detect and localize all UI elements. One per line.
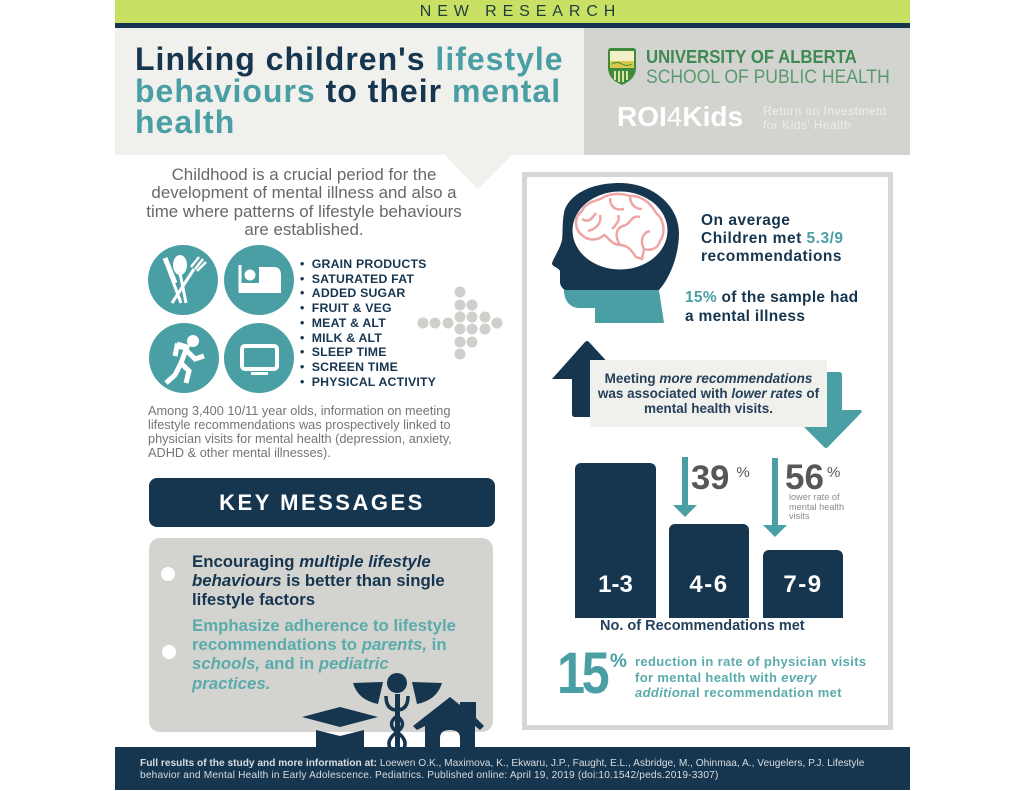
lifestyle list: • GRAIN PRODUCTS [300, 257, 427, 271]
lifestyle list: • SCREEN TIME [300, 360, 398, 374]
association callout [590, 360, 827, 427]
university name: UNIVERSITY OF ALBERTA [646, 46, 857, 67]
title: Linking children's lifestyle [135, 41, 564, 77]
bar 4-6: 4-6 [689, 571, 729, 598]
mental illness text: a mental illness [685, 308, 805, 324]
icon: bed [224, 245, 294, 315]
lifestyle list: • SLEEP TIME [300, 345, 387, 359]
message 2: schools, and in pediatric [192, 654, 389, 673]
title: behaviours to their mental [135, 73, 561, 109]
lower rate note: visits [789, 511, 809, 521]
bullet 1 [161, 567, 175, 581]
key messages panel [149, 538, 493, 732]
association callout: was associated with lower rates of [598, 386, 819, 401]
dotted arrow [418, 286, 502, 360]
logo panel [584, 28, 910, 155]
top banner: NEW RESEARCH [420, 3, 621, 20]
study description [148, 403, 452, 460]
lifestyle list [300, 257, 436, 389]
arrow: 56 percent [763, 458, 787, 537]
ROI4Kids tagline: Return on Investment [763, 104, 887, 118]
lower rate note: lower rate of [789, 492, 840, 502]
mental illness text: 15% of the sample had [685, 289, 858, 306]
study description: physician visits for mental health (depression, anxiety, [148, 431, 452, 446]
lifestyle list: • PHYSICAL ACTIVITY [300, 375, 436, 389]
icon: television [224, 323, 294, 393]
message 1: lifestyle factors [192, 590, 315, 609]
message 1 [192, 552, 445, 609]
bar 1-3 [575, 463, 656, 618]
up arrow [552, 341, 606, 417]
lower rate note: mental health [789, 502, 844, 512]
ROI4Kids tagline [763, 104, 887, 132]
message 2: Emphasize adherence to lifestyle [192, 616, 456, 635]
intro text: Childhood is a crucial period for the [172, 165, 436, 184]
axis label: No. of Recommendations met [600, 618, 805, 634]
ROI4Kids tagline: for Kids' Health [763, 118, 851, 132]
message 2: recommendations to parents, in [192, 635, 447, 654]
study description: ADHD & other mental illnesses). [148, 445, 331, 460]
bar chart [575, 463, 843, 634]
reduction text [635, 654, 866, 700]
down arrow [804, 372, 862, 448]
title: health [135, 104, 235, 140]
icon: cutlery [148, 245, 218, 315]
reduction text: for mental health with every [635, 670, 817, 684]
lower rate note [789, 492, 844, 521]
association callout: mental health visits. [644, 401, 773, 416]
bar 1-3: 1-3 [598, 571, 633, 598]
intro text: are established. [244, 220, 364, 239]
average recommendations text: On average [701, 212, 790, 229]
school name: SCHOOL OF PUBLIC HEALTH [646, 66, 890, 88]
average recommendations text [701, 212, 844, 265]
icons: graduation cap, caduceus, house [302, 673, 484, 747]
association callout: Meeting more recommendations [605, 371, 812, 386]
footer citation [115, 747, 910, 790]
icon: head with brain [552, 183, 679, 323]
stat: 39 percent: 39 % [691, 459, 750, 497]
lifestyle list: • MILK & ALT [300, 331, 382, 345]
message 1: behaviours is better than single [192, 571, 445, 590]
footer citation: behavior and Mental Health in Early Adolescence. Pediatrics. Published online: April 19, 2019 (doi:10.1542/peds.2019-3307) [140, 770, 719, 781]
reduction text: reduction in rate of physician visits [635, 654, 866, 669]
lifestyle list: • ADDED SUGAR [300, 286, 406, 300]
percent sign: % [610, 651, 627, 672]
bar 4-6 [669, 524, 749, 618]
message 2: practices. [192, 674, 270, 693]
icon: university shield [608, 48, 636, 85]
reduction text: additional recommendation met [635, 685, 842, 700]
title panel [115, 28, 584, 155]
key messages heading: KEY MESSAGES [219, 490, 425, 515]
lifestyle list: • SATURATED FAT [300, 272, 414, 286]
intro text: development of mental illness and also a [151, 183, 457, 202]
icon: runner [149, 323, 219, 393]
study description: lifestyle recommendations was prospectively linked to [148, 417, 451, 432]
bar 7-9 [763, 550, 843, 618]
ROI4Kids logo: ROI4Kids [617, 101, 743, 132]
footer citation: Full results of the study and more information at: Loewen O.K., Maximova, K., Ekwaru, J.P., Faught, E.L., Asbridge, M., Ohinmaa, A., Veugelers, P.J. Lifestyle [140, 758, 864, 769]
mental illness text [685, 289, 858, 324]
intro text: time where patterns of lifestyle behaviours [146, 202, 462, 221]
average recommendations text: recommendations [701, 248, 842, 265]
bullet 2 [162, 645, 176, 659]
stat: 15 percent: 15 [557, 641, 606, 706]
key messages heading [149, 478, 495, 527]
findings panel [522, 172, 893, 730]
message 2 [192, 616, 456, 693]
study description: Among 3,400 10/11 year olds, information on meeting [148, 403, 450, 418]
top banner [115, 0, 910, 28]
lifestyle list: • FRUIT & VEG [300, 301, 392, 315]
intro text [146, 165, 462, 239]
message 1: Encouraging multiple lifestyle [192, 552, 431, 571]
stat: 56 percent: 56% [785, 458, 840, 497]
arrow: 39 percent [673, 457, 697, 517]
title pointer triangle [445, 155, 512, 189]
average recommendations text: Children met 5.3/9 [701, 230, 844, 247]
lifestyle list: • MEAT & ALT [300, 316, 386, 330]
title [135, 41, 564, 140]
bar 7-9: 7-9 [783, 571, 823, 598]
